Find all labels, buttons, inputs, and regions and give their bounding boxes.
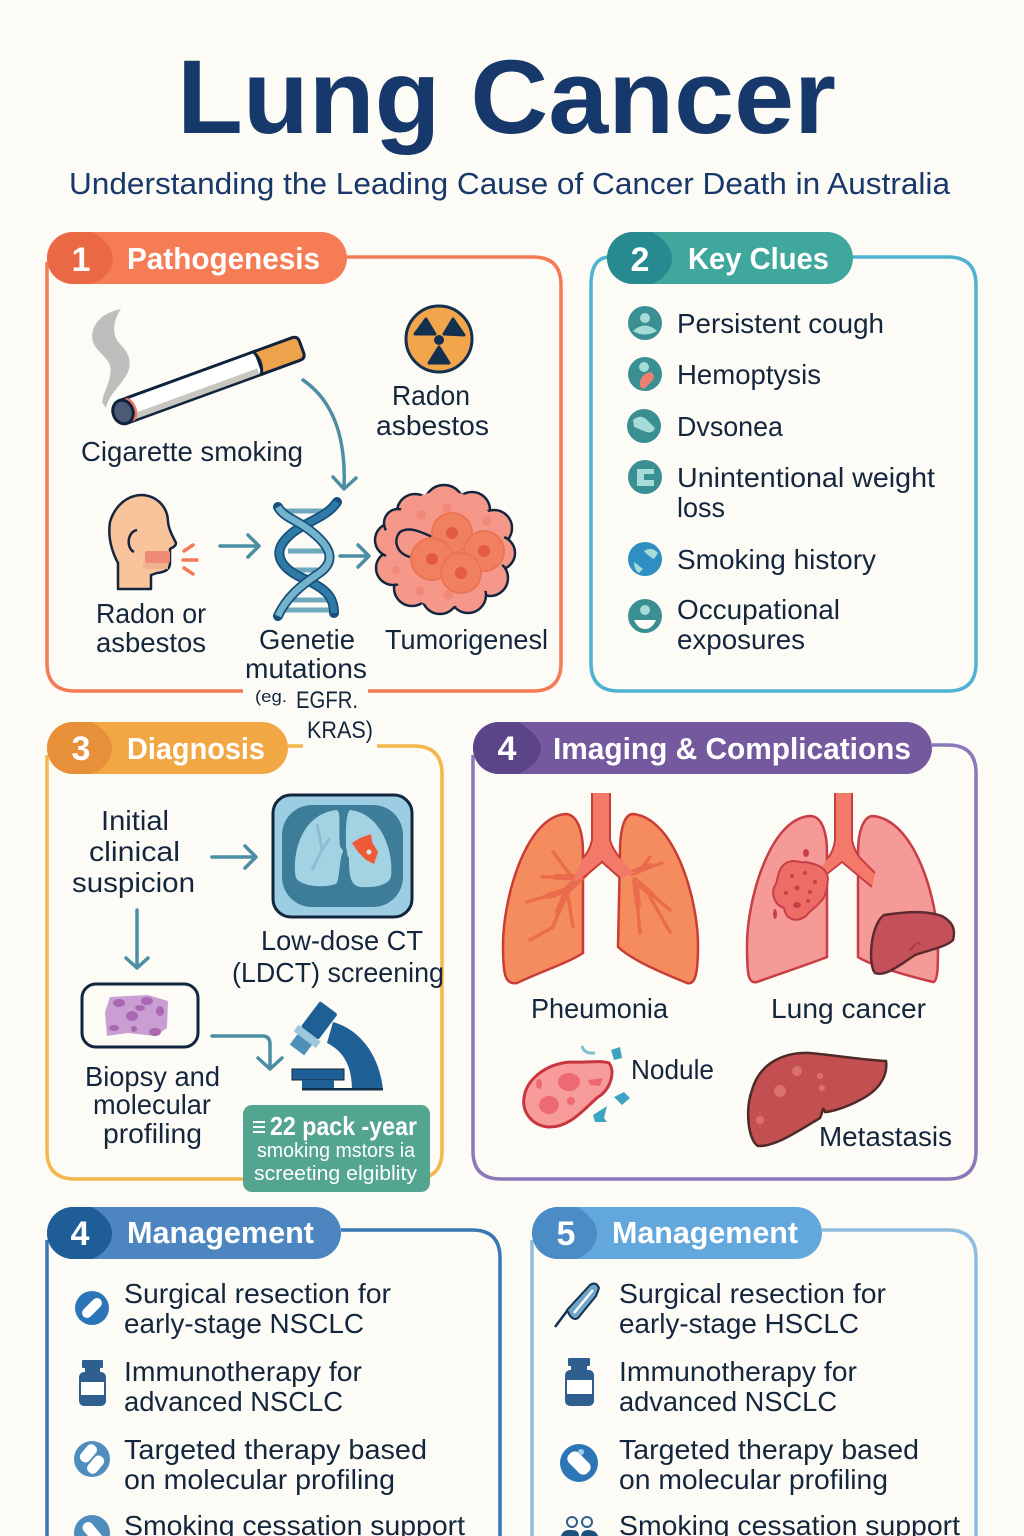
illustration: liver metastasis [748, 1053, 886, 1146]
label: cigarette smoking: Cigarette smoking [81, 436, 303, 467]
label: radon asbestos [376, 380, 489, 441]
icon: tumour [375, 485, 515, 614]
illustration: pneumonia lungs [503, 793, 698, 983]
clue: occupational exposures: exposures [677, 624, 805, 655]
label: radon or asbestos: Radon or [96, 598, 206, 629]
label: biopsy and molecular profiling: Biopsy and [85, 1061, 220, 1092]
heading: management right: 5 [557, 1215, 575, 1253]
label: radon asbestos: asbestos [376, 410, 489, 441]
icon: CT scan [273, 795, 412, 917]
label: radon or asbestos: asbestos [96, 627, 206, 658]
clue: hemoptysis: Hemoptysis [677, 359, 821, 390]
callout: pack-year eligibility: screeting elgiblity [254, 1163, 417, 1185]
label: low-dose CT: Low-dose CT [261, 925, 423, 956]
heading: key clues: 2 [631, 241, 649, 279]
label: pneumonia: Pheumonia [531, 993, 668, 1024]
heading: diagnosis: Diagnosis [127, 731, 265, 766]
icon: head breathing [109, 495, 197, 589]
item: immunotherapy: Immunotherapy for [124, 1356, 362, 1387]
illustration: nodule [524, 1046, 630, 1127]
label: biopsy and molecular profiling: profiling [103, 1118, 202, 1149]
icon: cigarette with smoke [92, 309, 306, 427]
heading: pathogenesis: Pathogenesis [127, 241, 320, 276]
item: targeted therapy: on molecular profiling [124, 1464, 395, 1495]
arrow: to DNA [303, 380, 356, 489]
label: metastasis: Metastasis [819, 1121, 952, 1152]
arrow: biopsy to microscope [212, 1036, 282, 1069]
panel: diagnosis [47, 722, 444, 1192]
heading: management left: 4 [71, 1215, 90, 1253]
label: lung cancer: Lung cancer [771, 993, 926, 1024]
heading: key clues: Key Clues [688, 241, 829, 276]
clue: weight loss: Unintentional weight [677, 462, 935, 493]
item: immunotherapy [565, 1356, 857, 1417]
clue: occupational exposures [628, 594, 840, 655]
panel: management right [532, 1207, 976, 1536]
subtitle: Understanding the Leading Cause of Cancer Death in Australia [69, 166, 951, 201]
label: initial clinical suspicion: suspicion [72, 867, 195, 898]
heading: management right [532, 1207, 822, 1259]
icon: biopsy tissue [82, 984, 198, 1047]
heading: pathogenesis [47, 232, 347, 284]
label: initial clinical suspicion [72, 805, 195, 898]
label: radon or asbestos [96, 598, 206, 658]
item: surgical resection: Surgical resection for [619, 1278, 886, 1309]
icon: DNA helix [278, 502, 337, 616]
item: surgical resection: early-stage HSCLC [619, 1308, 859, 1339]
heading: management right: Management [612, 1215, 798, 1250]
label: radon asbestos: Radon [392, 380, 470, 411]
heading: diagnosis: 3 [72, 730, 90, 768]
heading: management left: Management [127, 1215, 314, 1250]
label: low-dose CT: (LDCT) screening [232, 957, 444, 988]
item: targeted therapy [560, 1434, 919, 1495]
label: genetic mutations: EGFR. [296, 687, 358, 714]
item: immunotherapy: advanced NSCLC [619, 1386, 837, 1417]
item: targeted therapy: Targeted therapy based [619, 1434, 919, 1465]
icon: radiation [406, 306, 472, 372]
callout: pack-year eligibility: smoking mstors ia [257, 1140, 416, 1162]
label: initial clinical suspicion: Initial [101, 805, 169, 836]
label: initial clinical suspicion: clinical [89, 836, 180, 867]
label: low-dose CT [232, 925, 444, 988]
clue: hemoptysis [628, 357, 821, 391]
clue: dyspnea: Dvsonea [677, 411, 783, 442]
label: biopsy and molecular profiling [85, 1061, 220, 1149]
heading: pathogenesis: 1 [72, 241, 90, 279]
clue: dyspnea [627, 409, 783, 443]
panel: imaging and complications [473, 722, 976, 1179]
label: tumorigenesis: Tumorigenesl [385, 624, 548, 655]
arrow: head to DNA [220, 535, 259, 557]
panel: management left [47, 1207, 500, 1536]
label: genetic mutations [245, 624, 373, 744]
item: immunotherapy: advanced NSCLC [124, 1386, 343, 1417]
panel: pathogenesis [47, 232, 561, 744]
heading: management left [47, 1207, 341, 1259]
clue: occupational exposures: Occupational [677, 594, 840, 625]
callout: pack-year eligibility [243, 1105, 430, 1192]
arrow: DNA to tumour [340, 545, 369, 567]
heading: diagnosis [47, 722, 288, 774]
item: surgical resection: Surgical resection for [124, 1278, 391, 1309]
label: genetic mutations: (eg. [255, 687, 287, 706]
item: surgical resection: early-stage NSCLC [124, 1308, 364, 1339]
title: Lung Cancer [177, 39, 836, 156]
heading: imaging and complications [473, 722, 932, 774]
item: surgical resection [75, 1278, 391, 1339]
callout: pack-year eligibility: 22 pack -year [270, 1111, 417, 1141]
item: targeted therapy [74, 1434, 427, 1495]
label: biopsy and molecular profiling: molecular [93, 1089, 211, 1120]
heading: key clues [607, 232, 853, 284]
clue: persistent cough: Persistent cough [677, 308, 884, 339]
item: immunotherapy: Immunotherapy for [619, 1356, 857, 1387]
arrow: to biopsy [126, 910, 148, 968]
item: surgical resection [555, 1278, 886, 1339]
label: genetic mutations: KRAS) [307, 717, 373, 744]
illustration: lung with mass and liver [747, 793, 954, 982]
clue: smoking history: Smoking history [677, 544, 876, 575]
label: nodule: Nodule [631, 1054, 714, 1085]
item: targeted therapy: Targeted therapy based [124, 1434, 427, 1465]
label: genetic mutations: Genetie [259, 624, 355, 655]
clue: weight loss [628, 460, 935, 523]
item: immunotherapy [79, 1356, 362, 1417]
label: genetic mutations: mutations [245, 653, 367, 684]
heading: imaging and complications: 4 [498, 730, 517, 768]
item: targeted therapy: on molecular profiling [619, 1464, 888, 1495]
panel: key clues [591, 232, 976, 691]
icon: microscope [286, 999, 383, 1090]
clue: weight loss: loss [677, 492, 725, 523]
heading: imaging and complications: Imaging & Complications [553, 731, 911, 766]
arrow: to CT [212, 846, 256, 868]
